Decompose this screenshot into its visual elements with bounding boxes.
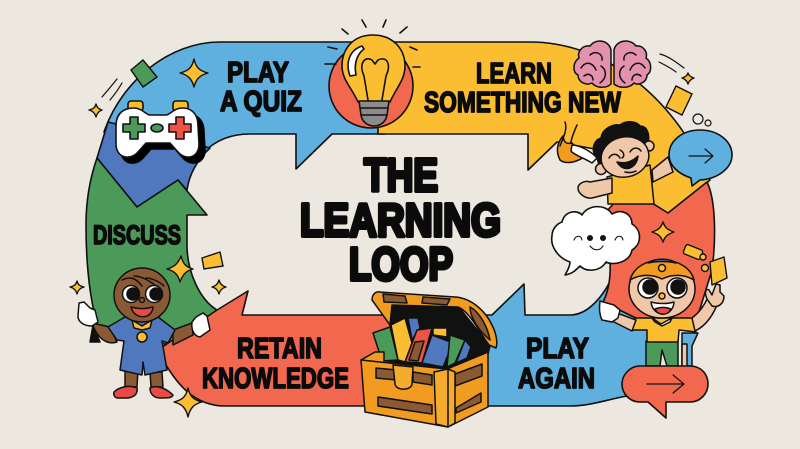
icon: light bulb	[325, 20, 420, 128]
icon: brain	[574, 41, 651, 87]
icon: sparkles	[70, 59, 694, 417]
label: play a quiz	[220, 57, 302, 118]
title: LOOP	[349, 238, 453, 290]
segment: retain knowledge	[158, 291, 390, 406]
title: THE	[364, 149, 438, 201]
illustration: treasure chest with books	[361, 292, 497, 427]
segment: play a quiz	[104, 42, 385, 169]
segment: discuss	[86, 158, 217, 345]
book: blue right	[456, 340, 471, 363]
label: discuss: DISCUSS	[93, 220, 181, 250]
illustration: child with flame	[557, 122, 673, 204]
label: play again: PLAY	[526, 333, 589, 365]
label: play a quiz: PLAY	[227, 57, 289, 89]
segment: learn something new	[378, 42, 710, 215]
book: blue behind	[408, 318, 420, 340]
illustration: boy on the left	[78, 268, 210, 398]
title	[300, 149, 501, 290]
label: retain knowledge: KNOWLEDGE	[202, 363, 349, 395]
title: LEARNING	[300, 194, 501, 246]
panel: learning loop ribbon	[86, 42, 715, 406]
icon: game controller	[116, 101, 205, 163]
book: small yellow	[433, 328, 447, 337]
icon: blue speech bubble with arrow	[669, 130, 732, 186]
label: learn something new: LEARN	[476, 58, 552, 90]
book: yellow	[391, 318, 412, 362]
icon: yellow card top right	[666, 86, 692, 115]
label: play a quiz: A QUIZ	[220, 86, 302, 118]
book: red	[405, 328, 432, 363]
label: play again	[518, 333, 595, 395]
icon: red speech bubble with arrow	[622, 366, 708, 418]
book: green right	[447, 335, 465, 367]
book: green left	[373, 327, 398, 361]
icon: green card	[131, 60, 157, 87]
segment: red right arrow	[603, 182, 715, 325]
segment: play again	[480, 275, 665, 406]
segment: dark blue transition	[97, 122, 210, 207]
chest box	[361, 352, 488, 427]
chest back-left rim	[361, 352, 384, 363]
motion lines	[102, 54, 711, 126]
icon: yellow cards near right boy	[683, 244, 727, 285]
label: learn something new: SOMETHING NEW	[424, 87, 621, 119]
label: learn something new	[424, 58, 621, 119]
icon: smiling cloud speech bubble	[552, 207, 640, 275]
book: blue	[422, 335, 453, 367]
illustration: boy on the right	[599, 259, 724, 367]
icon: yellow card left	[202, 252, 223, 269]
label: play again: AGAIN	[518, 363, 595, 395]
label: retain knowledge	[202, 333, 349, 395]
label: retain knowledge: RETAIN	[237, 333, 322, 365]
